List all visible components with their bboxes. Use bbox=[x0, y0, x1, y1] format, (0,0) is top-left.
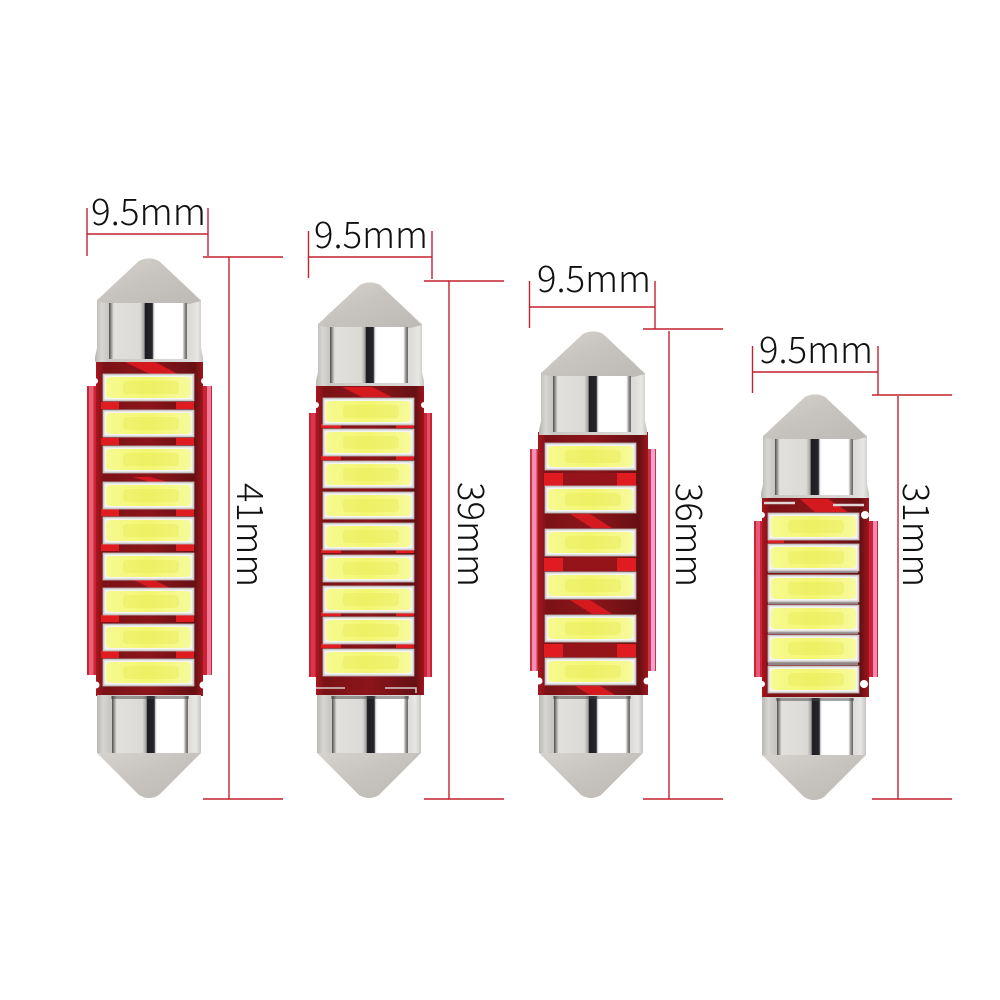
circuit board bbox=[92, 360, 207, 696]
dimension: bulb 3 length: 36mm bbox=[665, 483, 719, 587]
LED chips bbox=[323, 398, 414, 676]
bulb 2: 39mm bbox=[309, 282, 432, 798]
bottom metal cap bbox=[317, 695, 421, 798]
dimension: bulb 4 length bbox=[872, 395, 952, 799]
circuit board bbox=[759, 496, 869, 697]
dimension: bulb 3 length bbox=[643, 329, 723, 799]
bottom metal cap bbox=[97, 695, 201, 798]
circuit board bbox=[313, 384, 427, 695]
dimension: bulb 1 length bbox=[203, 257, 283, 799]
side wings bbox=[309, 413, 432, 677]
bulb 4: 31mm bbox=[754, 394, 878, 800]
top metal cap bbox=[761, 394, 869, 498]
side wings bbox=[87, 386, 212, 675]
dimension: bulb 2 length bbox=[424, 281, 504, 799]
dimension: bulb 1 width: 9.5mm bbox=[91, 182, 206, 236]
bottom metal cap bbox=[762, 697, 866, 800]
dimension: bulb 2 width: 9.5mm bbox=[314, 205, 428, 259]
dimension: bulb 4 width bbox=[752, 320, 878, 395]
top metal cap bbox=[95, 258, 203, 362]
dimension: bulb 4 width: 9.5mm bbox=[759, 320, 873, 374]
dimension: bulb 1 width bbox=[87, 182, 208, 256]
dimension: bulb 2 length: 39mm bbox=[447, 482, 501, 587]
bulb 3: 36mm bbox=[530, 332, 656, 798]
side wings bbox=[530, 449, 656, 671]
LED chips bbox=[545, 443, 636, 685]
bottom metal cap bbox=[539, 695, 643, 798]
side wings bbox=[754, 521, 878, 677]
top metal cap bbox=[316, 282, 424, 386]
dimension: bulb 2 width bbox=[308, 205, 432, 279]
top metal cap bbox=[539, 332, 647, 435]
LED chips bbox=[768, 513, 859, 693]
circuit board bbox=[536, 432, 650, 695]
dimension: bulb 1 length: 41mm bbox=[226, 483, 280, 587]
dimension: bulb 4 length: 31mm bbox=[892, 483, 946, 587]
dimension: bulb 3 width bbox=[530, 249, 655, 329]
bulb 1: 41mm bbox=[87, 258, 212, 798]
dimension: bulb 3 width: 9.5mm bbox=[537, 249, 651, 303]
LED chips bbox=[103, 374, 194, 686]
